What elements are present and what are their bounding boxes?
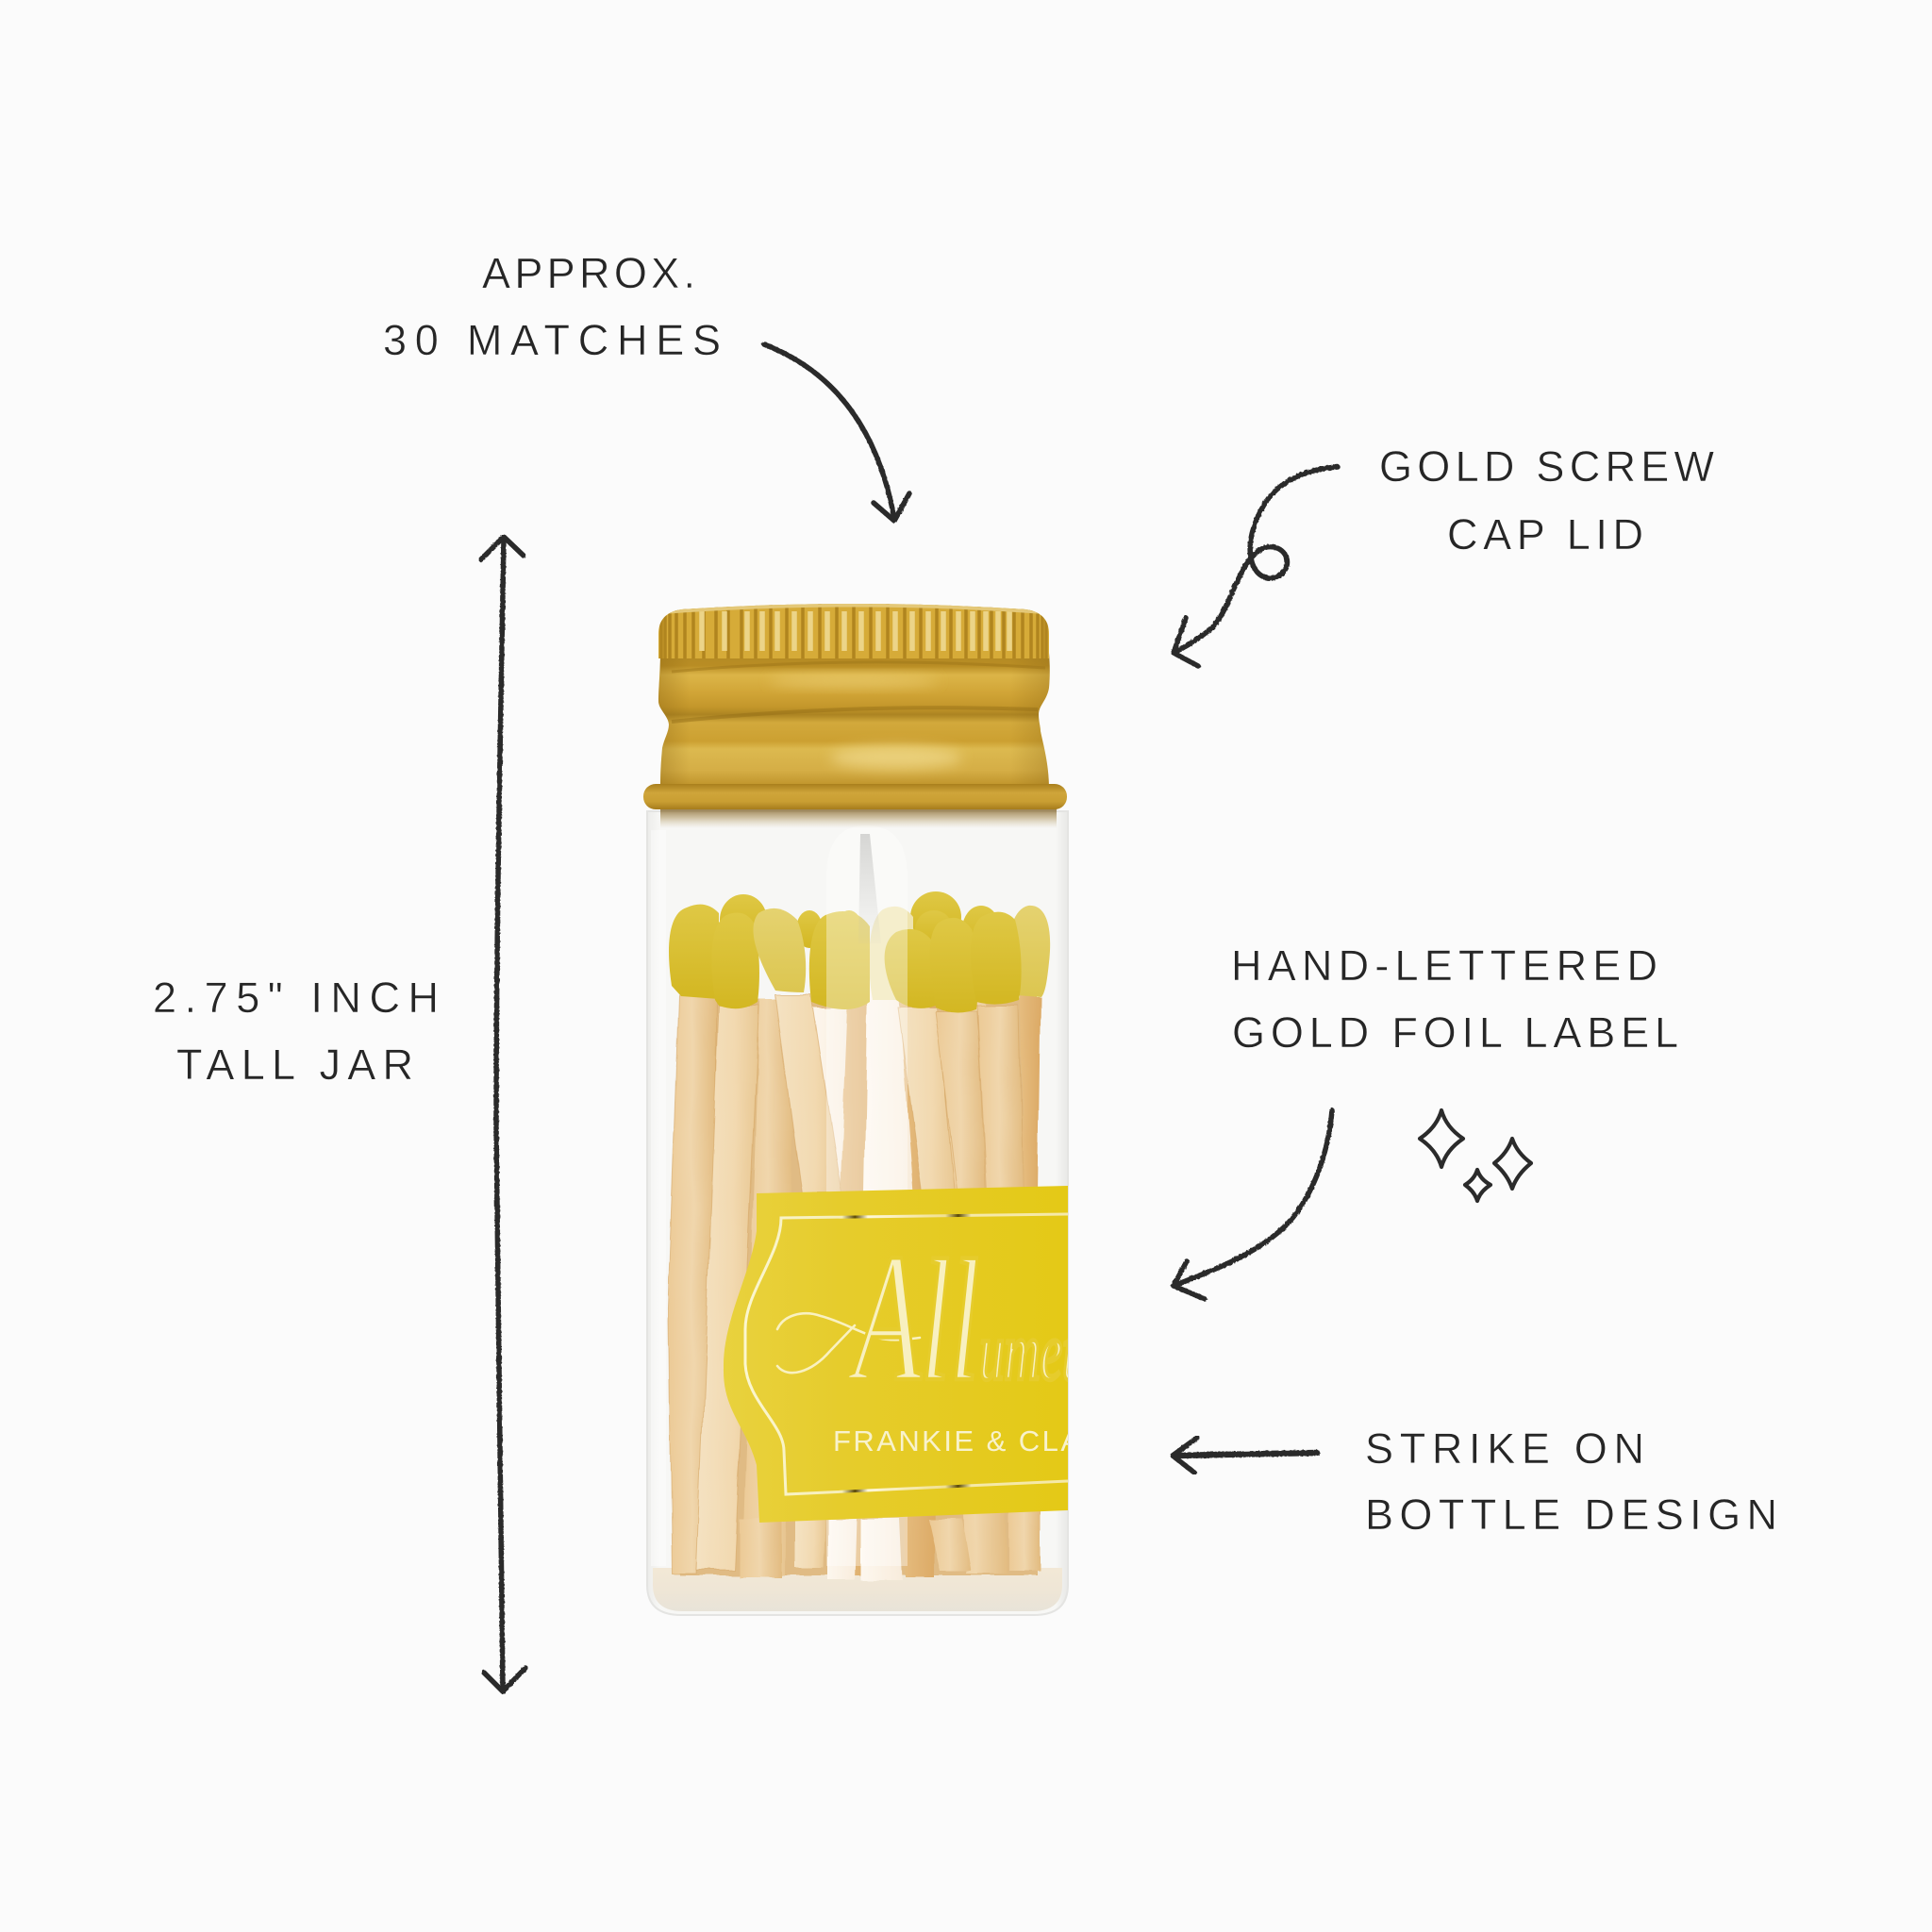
icon: sparkles <box>1420 1110 1531 1201</box>
arrow: matches count to jar <box>764 344 909 521</box>
arrow: looped arrow to lid <box>1174 467 1338 666</box>
height caption <box>153 974 439 1089</box>
glass body <box>647 811 1068 1615</box>
jar <box>643 599 1112 1615</box>
height caption: 2.75" INCH <box>153 974 439 1022</box>
lid caption: CAP LID <box>1447 510 1643 558</box>
arrow: label caption to label <box>1174 1110 1332 1299</box>
gold screw cap <box>643 599 1067 809</box>
lid caption: GOLD SCREW <box>1379 442 1715 491</box>
glass reflection strip <box>826 825 908 1566</box>
foil flourish <box>777 1313 920 1373</box>
label caption: GOLD FOIL LABEL <box>1232 1008 1678 1057</box>
lid caption <box>1379 442 1715 558</box>
strike caption: BOTTLE DESIGN <box>1365 1491 1777 1539</box>
foil script logo: Allumette <box>847 1216 1112 1419</box>
strike caption: STRIKE ON <box>1365 1424 1644 1473</box>
foil brand name: FRANKIE & CLA <box>833 1424 1080 1457</box>
matches count caption <box>383 249 721 364</box>
label caption: HAND-LETTERED <box>1231 941 1657 990</box>
label caption <box>1231 941 1678 1057</box>
height caption: TALL JAR <box>176 1041 413 1089</box>
cap threads <box>658 653 1050 789</box>
matches count caption: APPROX. <box>482 249 695 297</box>
front match heads <box>1008 906 1050 997</box>
back match heads <box>720 894 767 945</box>
match heads <box>669 891 1050 1013</box>
glass base <box>653 1568 1062 1611</box>
arrow: jar height double arrow <box>481 537 525 1691</box>
matches count caption: 30 MATCHES <box>383 316 721 364</box>
cap underside shadow <box>660 808 1057 828</box>
foil border <box>745 1214 1068 1494</box>
strike caption <box>1365 1424 1777 1539</box>
knurled rim <box>658 604 1049 658</box>
paper label <box>724 1186 1068 1523</box>
cap flange <box>643 784 1067 809</box>
matches <box>668 986 1041 1580</box>
arrow: strike caption to jar <box>1173 1438 1317 1473</box>
